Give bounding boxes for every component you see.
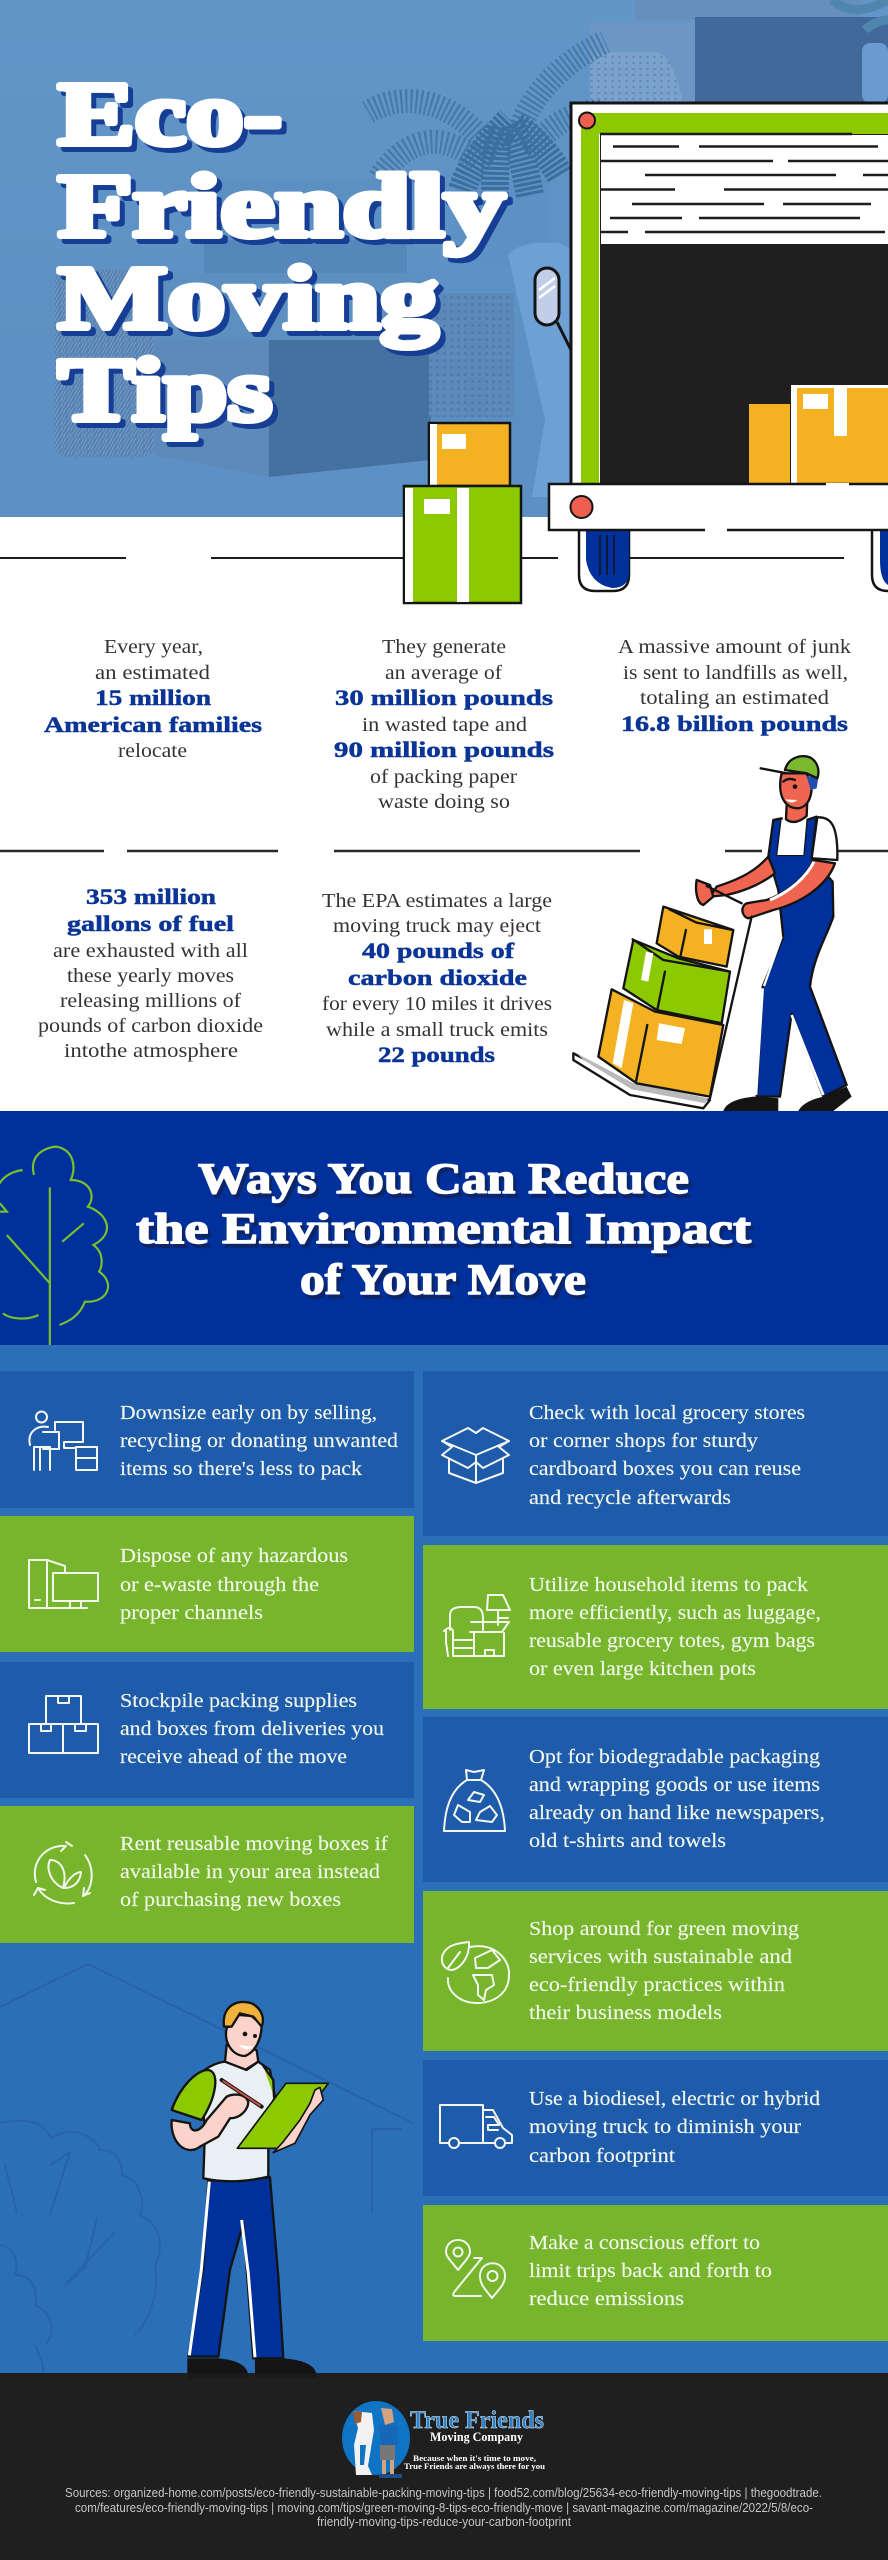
fact: tape and paper waste: 30 million pounds: [335, 685, 554, 710]
man t-shirt: [200, 2062, 275, 2181]
mover arms: [710, 857, 775, 897]
tip card: biodegradable packaging: and wrapping goods or use items: [529, 1774, 820, 1796]
illustration: mover with hand truck: [573, 756, 852, 1111]
tip card: reusable boxes: Rent reusable moving boxes if: [120, 1833, 388, 1855]
title: Eco-: [58, 65, 282, 164]
section heading: of Your Move: [300, 1257, 586, 1304]
tip card: reusable boxes: of purchasing new boxes: [120, 1889, 341, 1911]
tip card: biodiesel truck: [423, 2060, 888, 2196]
tip card: limit trips: Make a conscious effort to: [529, 2232, 760, 2254]
fact: tape and paper waste: 90 million pounds: [334, 737, 555, 762]
stacked boxes: [404, 423, 521, 603]
tip card: biodiesel truck: Use a biodiesel, electric or hybrid: [529, 2088, 820, 2110]
fact: EPA carbon dioxide: for every 10 miles it drives: [322, 993, 552, 1015]
sources: com/features/eco-friendly-moving-tips | moving.com/tips/green-moving-8-tips-eco-friendly-move | savant-magazine.com/magazine/2022/5/8/eco-: [75, 2501, 813, 2515]
fact: tape and paper waste: waste doing so: [378, 791, 510, 813]
fact: EPA carbon dioxide: while a small truck emits: [326, 1019, 548, 1041]
tip card: cardboard boxes: and recycle afterwards: [529, 1487, 731, 1509]
truck: [535, 103, 888, 591]
footer: [0, 2373, 888, 2560]
tip card: biodegradable packaging: old t-shirts and towels: [529, 1830, 726, 1852]
fact: tape and paper waste: They generate: [382, 636, 506, 658]
icon: stacked boxes: [29, 1696, 98, 1753]
man pencil: [222, 2080, 262, 2107]
icon: recycle leaf: [34, 1842, 92, 1903]
truck tail light: [579, 112, 595, 128]
middle box: [623, 940, 730, 1023]
fact: gallons of fuel: intothe atmosphere: [64, 1040, 238, 1062]
man right hand: [273, 2087, 323, 2153]
tip card: downsize: items so there's less to pack: [120, 1458, 362, 1480]
man trousers: [188, 2177, 283, 2358]
tip card: household items: Utilize household items to pack: [529, 1574, 808, 1596]
fact: landfill junk: [618, 636, 851, 736]
fact: 15 million families: relocate: [118, 740, 187, 762]
hand truck: [707, 886, 752, 1098]
tip card: biodiesel truck: moving truck to diminish your: [529, 2116, 801, 2138]
fact: EPA carbon dioxide: moving truck may eject: [333, 915, 541, 937]
tip card: cardboard boxes: cardboard boxes you can reuse: [529, 1458, 801, 1480]
icon: person at desk: [29, 1412, 97, 1470]
tip card: e-waste: proper channels: [120, 1602, 263, 1624]
tip card: reusable boxes: [0, 1806, 414, 1943]
fact: tape and paper waste: [334, 636, 555, 813]
fact: landfill junk: totaling an estimated: [640, 687, 829, 709]
icon: globe and leaf: [442, 1942, 509, 2003]
tip card: limit trips: limit trips back and forth to: [529, 2260, 772, 2282]
fact: 15 million families: Every year,: [104, 636, 203, 658]
tip card: green moving services: Shop around for green moving: [529, 1918, 799, 1940]
bottom box: [598, 989, 723, 1097]
fact: 15 million families: an estimated: [95, 662, 210, 684]
tip card: e-waste: Dispose of any hazardous: [120, 1545, 348, 1567]
fact: EPA carbon dioxide: The EPA estimates a large: [322, 890, 552, 912]
tip card: cardboard boxes: or corner shops for sturdy: [529, 1430, 758, 1452]
truck bed: [549, 484, 888, 530]
title: Moving: [58, 249, 438, 348]
mover shirt: [777, 817, 807, 855]
tip card: cardboard boxes: Check with local grocery stores: [529, 1402, 805, 1424]
fact: 15 million families: [44, 636, 263, 762]
fact: landfill junk: A massive amount of junk: [618, 636, 851, 658]
icon: computer: [29, 1560, 98, 1608]
company logo: True Friends: [410, 2407, 544, 2434]
man neck and head: [225, 2045, 258, 2070]
mover neck and head: [786, 802, 807, 822]
sources: friendly-moving-tips-reduce-your-carbon-footprint: [317, 2515, 571, 2529]
company logo: [342, 2401, 545, 2478]
chair: [508, 242, 572, 497]
tip card: green moving services: services with sustainable and: [529, 1946, 792, 1968]
sources: Sources: organized-home.com/posts/eco-friendly-sustainable-packing-moving-tips | food52.com/blog/25634-eco-friendly-moving-tips | thegoodtrade.: [65, 2486, 822, 2500]
truck wheels: [579, 530, 888, 591]
tip card: e-waste: or e-waste through the: [120, 1574, 319, 1596]
fact: gallons of fuel: gallons of fuel: [67, 911, 234, 936]
man left arm: [172, 2095, 248, 2150]
tip card: household items: reusable grocery totes, gym bags: [529, 1630, 815, 1652]
fact: landfill junk: 16.8 billion pounds: [621, 711, 849, 736]
mover overalls: [757, 817, 847, 1097]
fact: EPA carbon dioxide: 22 pounds: [378, 1042, 496, 1067]
icon: recycling bag: [444, 1770, 505, 1831]
tip card: downsize: [0, 1371, 414, 1508]
tip card: reusable boxes: available in your area instead: [120, 1861, 380, 1883]
tip card: green moving services: eco-friendly practices within: [529, 1974, 785, 1996]
fact: landfill junk: is sent to landfills as well,: [623, 662, 848, 684]
tips panel background: [0, 1345, 888, 2373]
faint house and trees background: [0, 1964, 413, 2373]
fact: tape and paper waste: an average of: [385, 662, 502, 684]
plant: [368, 42, 605, 205]
fact: tape and paper waste: in wasted tape and: [362, 714, 527, 736]
icon: open box: [442, 1428, 509, 1483]
fact: gallons of fuel: these yearly moves: [67, 965, 234, 987]
tip card: cardboard boxes: [423, 1371, 888, 1536]
company logo: Because when it's time to move,: [413, 2453, 536, 2463]
fact: 15 million families: American families: [44, 712, 263, 737]
company logo: Moving Company: [430, 2430, 524, 2444]
icon: map pins route: [446, 2240, 505, 2298]
pot and stacked boxes: [455, 177, 548, 267]
man shoes: [187, 2358, 317, 2375]
tip card: green moving services: [423, 1891, 888, 2051]
title: Friendly: [58, 157, 505, 256]
tip card: biodegradable packaging: Opt for biodegradable packaging: [529, 1746, 820, 1768]
title: Tips: [58, 341, 272, 440]
tip card: limit trips: [423, 2205, 888, 2341]
section heading: the Environmental Impact: [136, 1206, 752, 1253]
hero photo background: [0, 0, 888, 517]
tip card: green moving services: their business models: [529, 2002, 722, 2024]
cargo boxes in truck: [749, 385, 888, 484]
fact: gallons of fuel: pounds of carbon dioxide: [38, 1015, 263, 1037]
icon: tree outline: [0, 1147, 108, 1345]
tip card: stockpile: receive ahead of the move: [120, 1746, 347, 1768]
clipboard: [237, 2083, 328, 2148]
tip card: household items: more efficiently, such as luggage,: [529, 1602, 821, 1624]
tip card: household items: or even large kitchen pots: [529, 1658, 756, 1680]
section banner: [0, 1111, 888, 1345]
fact: gallons of fuel: releasing millions of: [60, 990, 241, 1012]
tip card: limit trips: reduce emissions: [529, 2288, 684, 2310]
truck mirror: [535, 268, 572, 352]
icon: delivery truck: [440, 2105, 512, 2148]
fact: gallons of fuel: [38, 884, 263, 1062]
tip card: e-waste: [0, 1516, 414, 1652]
company logo: True Friends are always there for you: [404, 2461, 545, 2471]
tip card: biodegradable packaging: [423, 1717, 888, 1882]
section heading: Ways You Can Reduce: [198, 1156, 689, 1203]
tip card: downsize: Downsize early on by selling,: [120, 1402, 377, 1424]
dashed road line: [0, 557, 844, 559]
sources: [65, 2486, 822, 2529]
icon: armchair and lamp: [444, 1595, 510, 1656]
tip card: household items: [423, 1545, 888, 1709]
tip card: biodiesel truck: carbon footprint: [529, 2145, 675, 2167]
fact: gallons of fuel: are exhausted with all: [53, 940, 248, 962]
fact: EPA carbon dioxide: [322, 890, 552, 1067]
fact: EPA carbon dioxide: 40 pounds of: [362, 938, 515, 963]
tip card: stockpile: and boxes from deliveries you: [120, 1718, 384, 1740]
tip card: stockpile: [0, 1662, 414, 1798]
tip card: biodegradable packaging: already on hand like newspapers,: [529, 1802, 825, 1824]
section heading: [136, 1156, 752, 1304]
tip card: downsize: recycling or donating unwanted: [120, 1430, 398, 1452]
title: [58, 65, 505, 440]
fact: tape and paper waste: of packing paper: [370, 766, 517, 788]
illustration: man with clipboard: [172, 2002, 328, 2375]
fact: gallons of fuel: 353 million: [86, 884, 216, 909]
mover shoes: [723, 1087, 852, 1111]
man green sleeve: [172, 2070, 215, 2120]
top box: [657, 907, 733, 967]
top right boxes: [635, 0, 862, 20]
fact: 15 million families: 15 million: [95, 685, 211, 710]
tip card: stockpile: Stockpile packing supplies: [120, 1690, 357, 1712]
fact: EPA carbon dioxide: carbon dioxide: [348, 965, 527, 990]
